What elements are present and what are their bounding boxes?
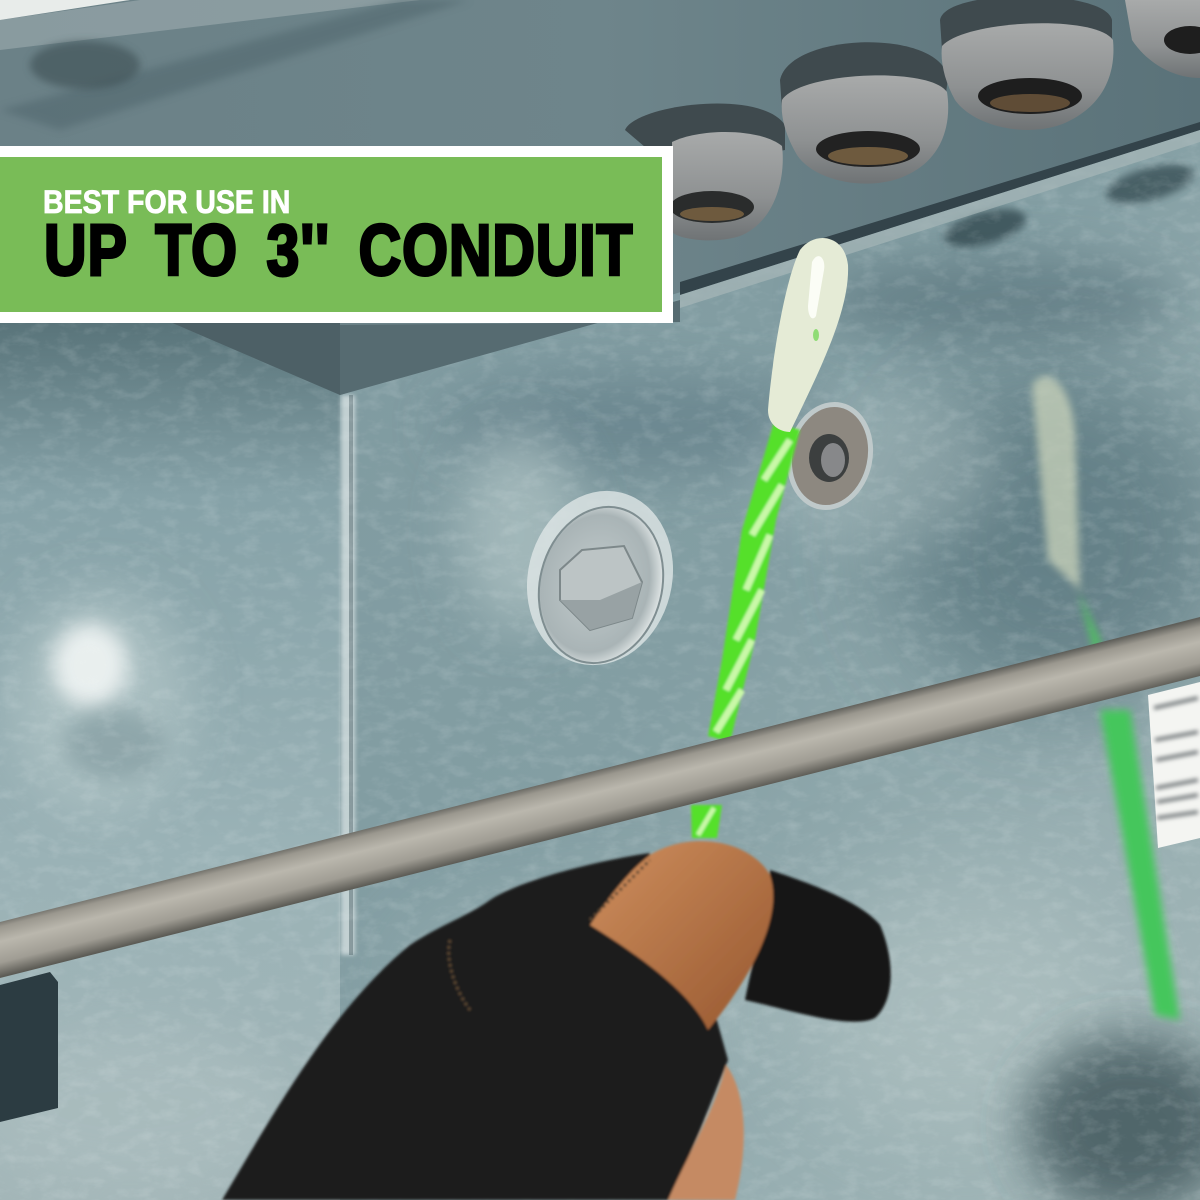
hex bolt with washer [509, 475, 691, 681]
rivet nut [780, 397, 880, 515]
nylon leader tip [768, 238, 848, 432]
gloved hand [222, 841, 891, 1200]
left wall panel [0, 320, 350, 1200]
banner subheading: BEST FOR USE IN [43, 184, 290, 220]
fitting 1 [625, 104, 785, 240]
top shelf underside [0, 0, 1200, 395]
banner heading: UP TO 3'' CONDUIT [44, 211, 633, 291]
fitting 2 [780, 42, 948, 184]
background blurred tape tip [1032, 376, 1180, 1020]
fitting 3 [940, 0, 1113, 130]
banner [0, 146, 673, 323]
right wall panel [340, 130, 1200, 1200]
fitting 4 [1125, 0, 1200, 78]
conduit fittings [625, 0, 1200, 240]
metal handrail [0, 617, 1200, 978]
label sticker on wall [1148, 682, 1200, 848]
green fish tape [691, 422, 800, 838]
dark bracket [0, 972, 58, 1122]
